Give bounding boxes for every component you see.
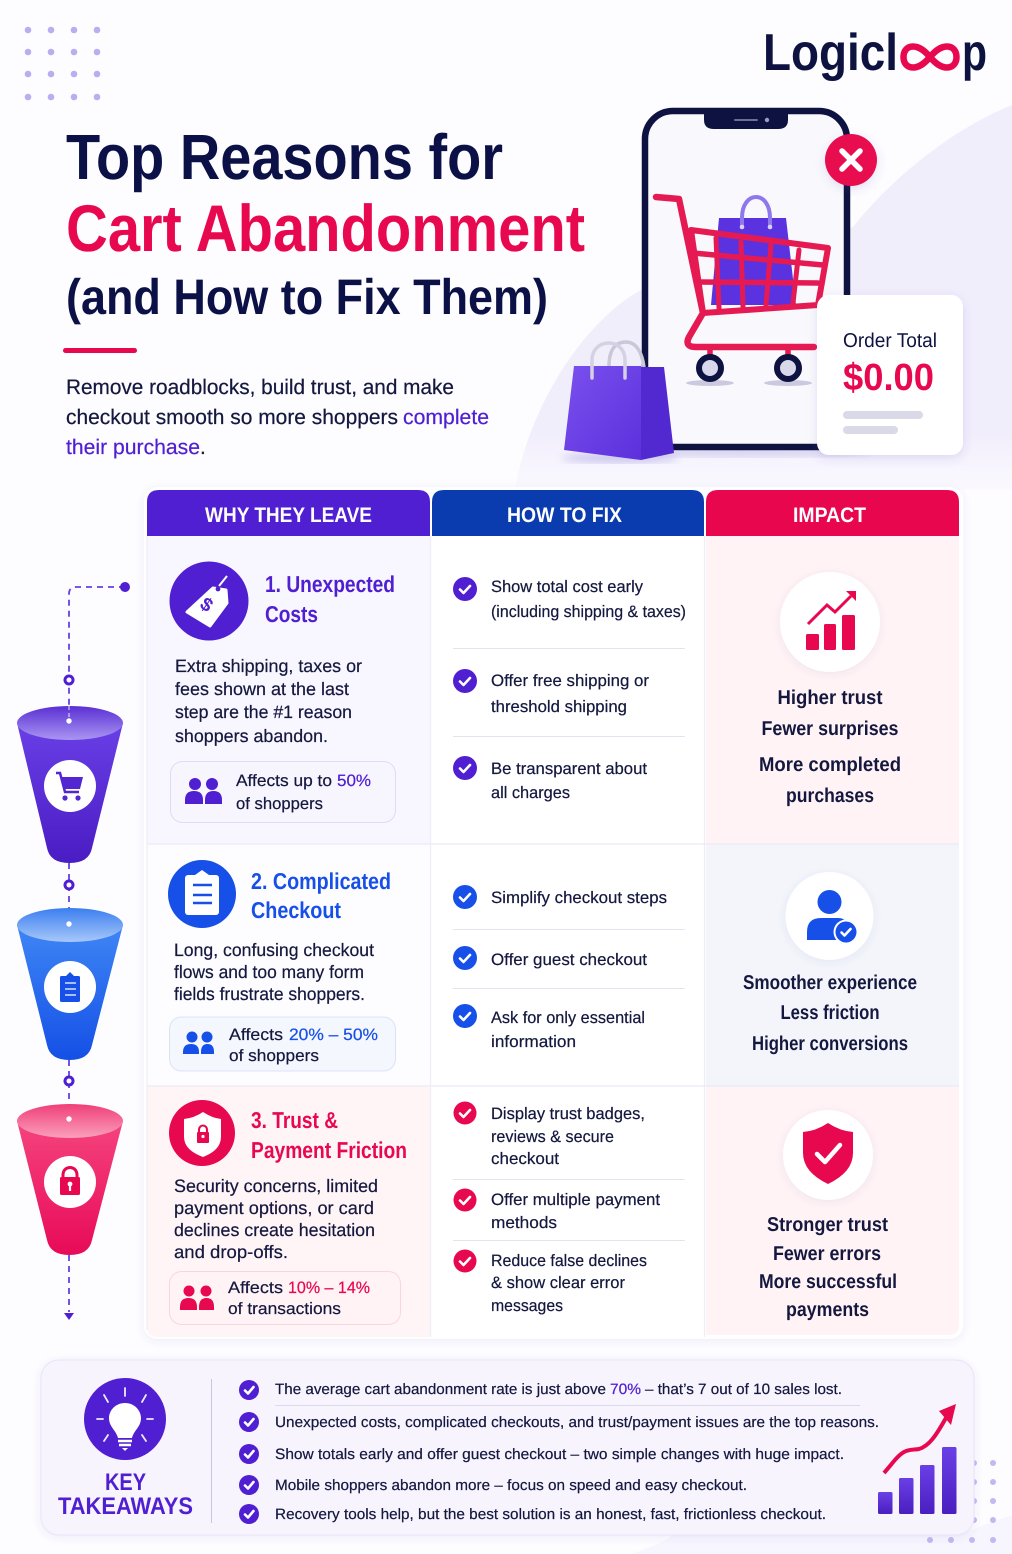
- stat box: 10-14% of transactions: of transactions: [228, 1300, 341, 1318]
- title underline: [63, 348, 137, 353]
- logo: Logicloop: p: [962, 24, 987, 82]
- heading: key takeaways: KEY: [105, 1469, 146, 1496]
- stat box: 50% of shoppers: [170, 762, 396, 822]
- impact text: Fewer errors: [773, 1243, 881, 1265]
- subtitle: Remove roadblocks, build trust, and make: [66, 376, 454, 399]
- logo: Logicloop: [763, 24, 987, 82]
- funnel 2: [17, 908, 123, 1060]
- panel: fixes for unexpected costs: Show total cost early: [491, 578, 644, 596]
- dots: bottom right: [927, 1460, 996, 1543]
- panel: fixes for trust and payment friction: & show clear error: [491, 1274, 625, 1292]
- icon: verified user: [786, 872, 874, 960]
- description: trust and payment friction: and drop-offs.: [174, 1242, 288, 1262]
- panel: unexpected costs: [170, 562, 396, 822]
- heading: unexpected costs: [265, 571, 395, 627]
- title: (and How to Fix Them): [66, 269, 548, 325]
- funnel 3: [17, 1104, 123, 1255]
- panel: fixes for complicated checkout: Simplify checkout steps: [491, 889, 667, 907]
- panel: fixes for complicated checkout: [453, 885, 685, 1051]
- stat box: 20-50% of shoppers: of shoppers: [229, 1047, 319, 1065]
- icon: shield check: [783, 1110, 873, 1200]
- panel: fixes for unexpected costs: threshold shipping: [491, 698, 627, 716]
- stat box: 50% of shoppers: of shoppers: [236, 795, 323, 813]
- chart: growth bars with arrow: [878, 1404, 956, 1514]
- description: complicated checkout: fields frustrate shoppers.: [174, 984, 365, 1004]
- description: unexpected costs: fees shown at the last: [175, 679, 349, 699]
- impact text: purchases: [786, 785, 874, 807]
- title: Cart Abandonment: [66, 191, 585, 265]
- impact text: Higher trust: [778, 687, 883, 709]
- heading: key takeaways: TAKEAWAYS: [58, 1493, 193, 1520]
- header: impact: IMPACT: [793, 504, 866, 527]
- panel: key takeaways: [41, 1360, 974, 1535]
- description: trust and payment friction: [174, 1176, 378, 1262]
- panel: fixes for trust and payment friction: messages: [491, 1297, 563, 1315]
- takeaway text: 70%: [610, 1381, 641, 1398]
- hero illustration: cart with bag: [656, 197, 828, 386]
- heading: key takeaways: [58, 1469, 193, 1520]
- panel: fixes for trust and payment friction: Display trust badges,: [491, 1105, 645, 1123]
- panel: fixes for unexpected costs: [453, 577, 686, 802]
- icon: clipboard: [168, 860, 236, 928]
- icon: price tag: $: [196, 594, 217, 617]
- takeaway text: Show totals early and offer guest checkout – two simple changes with huge impact.: [275, 1446, 844, 1463]
- header: how to fix: HOW TO FIX: [507, 504, 622, 527]
- funnel 1: [17, 706, 123, 863]
- description: complicated checkout: flows and too many form: [174, 962, 364, 982]
- panel: fixes for unexpected costs: all charges: [491, 784, 570, 802]
- panel: complicated checkout: [168, 860, 396, 1071]
- description: unexpected costs: step are the #1 reason: [175, 702, 352, 722]
- subtitle: [66, 376, 489, 459]
- heading: complicated checkout: Checkout: [251, 897, 341, 923]
- stat box: 50% of shoppers: 50%: [337, 772, 371, 790]
- description: complicated checkout: Long, confusing checkout: [174, 940, 374, 960]
- heading: complicated checkout: 2. Complicated: [251, 868, 391, 894]
- header: impact: [706, 490, 959, 536]
- stat box: 20-50% of shoppers: Affects: [229, 1026, 283, 1044]
- icon: price tag: [170, 562, 248, 640]
- impact text: Stronger trust: [767, 1214, 888, 1236]
- order total card: $0.00: [843, 357, 934, 399]
- heading: complicated checkout: [251, 868, 391, 923]
- panel: fixes for trust and payment friction: checkout: [491, 1150, 559, 1168]
- icon: light bulb: [84, 1378, 166, 1460]
- order total card: Order Total: [843, 330, 937, 352]
- stat box: 50% of shoppers: Affects up to: [236, 772, 332, 790]
- order total card: [817, 295, 963, 455]
- dots: top left: [25, 27, 100, 100]
- panel: trust and payment friction: [169, 1100, 407, 1324]
- takeaway text: The average cart abandonment rate is just above: [275, 1381, 606, 1398]
- stat box: 10-14% of transactions: Affects: [228, 1279, 283, 1297]
- impact text: payments: [786, 1299, 869, 1321]
- takeaway text: Mobile shoppers abandon more – focus on speed and easy checkout.: [275, 1477, 747, 1494]
- panel: fixes for trust and payment friction: [453, 1102, 685, 1315]
- hero illustration: close badge: [825, 134, 877, 186]
- hero illustration: phone: [610, 111, 870, 457]
- panel: fixes for trust and payment friction: Reduce false declines: [491, 1252, 647, 1270]
- panel: fixes for trust and payment friction: methods: [491, 1214, 557, 1232]
- description: trust and payment friction: payment options, or card: [174, 1198, 374, 1218]
- description: unexpected costs: shoppers abandon.: [175, 726, 328, 746]
- stat box: 20-50% of shoppers: [170, 1017, 396, 1071]
- impact text: More successful: [759, 1271, 897, 1293]
- panel: impact of payment trust: [759, 1110, 897, 1321]
- impact text: [759, 1214, 897, 1321]
- background swoosh: bottom: [632, 1515, 1012, 1554]
- stat box: 10-14% of transactions: 10% – 14%: [288, 1279, 370, 1297]
- panel: fixes for complicated checkout: Ask for only essential: [491, 1009, 645, 1027]
- panel: impact of simpler checkout: [743, 872, 917, 1055]
- stat box: 20-50% of shoppers: 20% – 50%: [289, 1026, 378, 1044]
- panel: fixes for complicated checkout: Offer guest checkout: [491, 951, 647, 969]
- heading: unexpected costs: Costs: [265, 601, 318, 627]
- connector line: [64, 582, 130, 1320]
- description: unexpected costs: Extra shipping, taxes or: [175, 656, 362, 676]
- logo: Logicloop: Logicl: [763, 24, 898, 82]
- takeaway text: Unexpected costs, complicated checkouts, and trust/payment issues are the top reasons.: [275, 1414, 879, 1431]
- impact text: Higher conversions: [752, 1033, 908, 1055]
- subtitle: complete: [403, 406, 489, 429]
- subtitle: checkout smooth so more shoppers: [66, 406, 398, 429]
- impact text: More completed: [759, 754, 901, 776]
- panel: impact of fixing costs: [759, 572, 901, 807]
- panel: fixes for unexpected costs: (including shipping & taxes): [491, 603, 686, 621]
- description: trust and payment friction: Security concerns, limited: [174, 1176, 378, 1196]
- heading: trust and payment friction: Payment Friction: [251, 1137, 407, 1163]
- header: why they leave: [147, 490, 430, 536]
- subtitle: .: [200, 436, 206, 459]
- panel: fixes for trust and payment friction: reviews & secure: [491, 1128, 614, 1146]
- heading: trust and payment friction: [251, 1107, 407, 1163]
- panel: fixes for complicated checkout: information: [491, 1033, 576, 1051]
- title: Top Reasons for: [66, 121, 503, 193]
- takeaway text: [275, 1381, 879, 1523]
- stat box: 10-14% of transactions: [170, 1272, 400, 1324]
- takeaway text: – that’s 7 out of 10 sales lost.: [645, 1381, 842, 1398]
- impact text: [743, 972, 917, 1055]
- description: trust and payment friction: declines create hesitation: [174, 1220, 375, 1240]
- takeaway text: Recovery tools help, but the best solution is an honest, fast, frictionless checkout.: [275, 1506, 826, 1523]
- title: [66, 121, 585, 325]
- impact text: [759, 687, 901, 807]
- impact text: Fewer surprises: [762, 718, 898, 740]
- description: complicated checkout: [174, 940, 374, 1004]
- table card: [144, 487, 963, 1339]
- checklist icons: [239, 1380, 259, 1524]
- icon: rising bar chart: [780, 572, 880, 672]
- header: how to fix: [432, 490, 704, 536]
- panel: fixes for unexpected costs: Offer free shipping or: [491, 672, 650, 690]
- subtitle: their purchase: [66, 436, 200, 459]
- description: unexpected costs: [175, 656, 362, 746]
- panel: fixes for trust and payment friction: Offer multiple payment: [491, 1191, 660, 1209]
- background swoosh: hero: [515, 105, 1012, 490]
- header: why they leave: WHY THEY LEAVE: [205, 504, 372, 527]
- impact text: Smoother experience: [743, 972, 917, 994]
- heading: trust and payment friction: 3. Trust &: [251, 1107, 338, 1133]
- impact text: Less friction: [780, 1002, 880, 1024]
- heading: unexpected costs: 1. Unexpected: [265, 571, 395, 597]
- panel: fixes for unexpected costs: Be transparent about: [491, 760, 647, 778]
- icon: shield lock: [169, 1100, 235, 1166]
- hero illustration: shopping bag: [562, 342, 678, 463]
